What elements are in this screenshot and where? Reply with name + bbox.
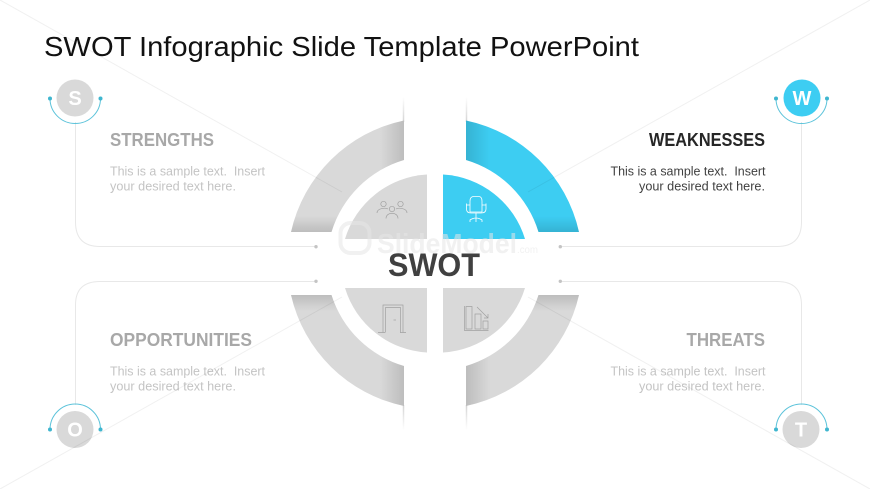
badge: O [56,411,94,448]
badge: S [56,80,94,116]
body: threats [610,364,766,394]
badge: W [784,80,820,116]
panel: threats [559,280,829,448]
arc: strengths badge [48,96,102,123]
badge: S: S [68,88,82,110]
connector dot: strengths [314,245,318,248]
body: threats: This is a sample text. Insert [610,364,766,378]
outline: weaknesses [560,122,802,246]
icon: declining chart [464,306,488,330]
outline: opportunities [76,282,316,405]
body: weaknesses: This is a sample text. Insert [610,164,766,178]
arc: opportunities badge [48,404,102,432]
ring segment: bottom left [291,295,404,406]
body: opportunities: This is a sample text. Insert [110,364,265,378]
icon: door [378,305,406,332]
watermark [340,223,538,259]
body: strengths [110,164,265,194]
vertical stubs above and below the rings [404,97,466,430]
inner quarter: strengths [345,174,427,239]
icon: office chair [466,196,486,222]
panel: strengths [48,80,318,248]
body: weaknesses: your desired text here. [639,178,765,194]
arc: threats badge [774,404,829,432]
heading: opportunities: OPPORTUNITIES [110,330,252,350]
outline: threats [560,282,802,405]
badge: W: W [793,88,812,110]
connector dot: threats [559,280,562,283]
watermark: .com [517,245,538,256]
inner quarter: threats [443,288,525,352]
body: weaknesses [610,164,766,194]
badge: T: T [795,420,807,442]
outline: strengths [76,122,316,246]
heading: threats: THREATS [686,330,765,350]
badge: O: O [67,420,83,442]
body: threats: your desired text here. [639,378,765,394]
connector dot: opportunities [314,280,318,283]
heading: strengths: STRENGTHS [110,130,214,150]
ring segment: bottom right [466,295,579,406]
badge: T [782,411,820,448]
body: opportunities [110,364,265,394]
ring segment: top right, highlighted [466,120,579,232]
body: strengths: your desired text here. [110,178,236,194]
body: strengths: This is a sample text. Insert [110,164,265,178]
connector dot: weaknesses [559,245,562,248]
arc: weaknesses badge [774,96,829,123]
watermark: SlideModel [377,228,517,259]
panel: opportunities [48,280,318,448]
inner quarter: opportunities [345,288,427,352]
heading: weaknesses: WEAKNESSES [649,130,765,150]
body: opportunities: your desired text here. [110,378,236,394]
ring segment: top left [291,120,404,232]
title: SWOT Infographic Slide Template PowerPoint [44,31,639,62]
center label: SWOT [388,247,480,283]
panel: weaknesses [559,80,829,248]
icon: people [377,201,407,218]
inner quarter: weaknesses [443,174,525,239]
